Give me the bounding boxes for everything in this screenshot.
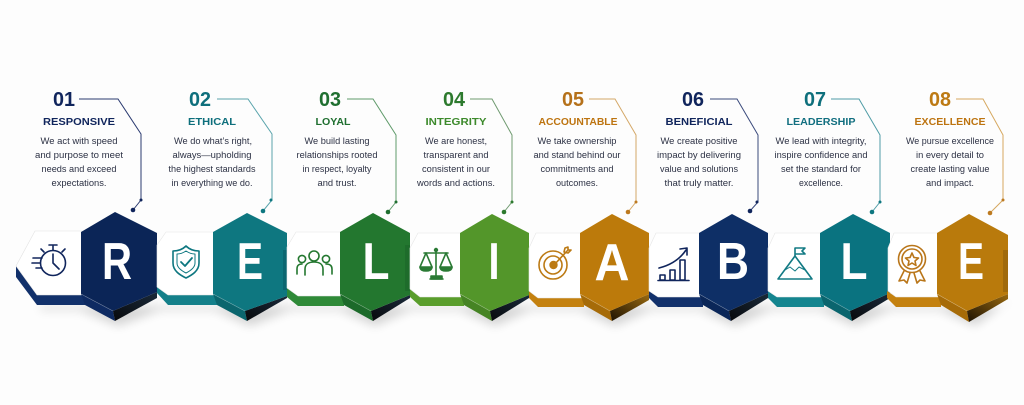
leader line (710, 99, 758, 213)
description (906, 136, 994, 189)
heading: responsive: RESPONSIVE (43, 116, 115, 128)
description: We take ownership (538, 136, 616, 147)
description: needs and exceed (42, 164, 116, 175)
icon: target (539, 247, 571, 279)
column 08: excellence (906, 89, 1004, 215)
leader line (347, 99, 398, 214)
number 01: 01 (53, 89, 75, 111)
description: expectations. (52, 178, 106, 189)
hexagon E: E (958, 233, 984, 291)
icon: shield (173, 246, 199, 278)
description: We do what’s right, (174, 136, 252, 147)
column 05: accountable (534, 89, 638, 214)
description: We act with speed (40, 136, 118, 147)
segment E (157, 213, 287, 321)
column 03: loyal (296, 89, 398, 214)
column 04: integrity (416, 89, 514, 214)
heading: ethical: ETHICAL (188, 116, 237, 128)
column 01: responsive (35, 89, 142, 212)
number 05: 05 (562, 89, 584, 111)
segment I (410, 214, 529, 321)
leader line (831, 99, 882, 214)
tab (768, 233, 824, 307)
tab (529, 233, 584, 307)
hexagon B: B (717, 233, 749, 291)
segment L second (768, 214, 890, 321)
description (534, 136, 621, 189)
column 07: leadership (774, 89, 882, 214)
description: and impact. (926, 178, 974, 189)
description (296, 136, 378, 189)
description: and trust. (318, 178, 356, 189)
leader line (589, 99, 638, 214)
description: consistent in our (422, 164, 491, 175)
column 02: ethical (168, 89, 272, 213)
icon: growth chart (658, 248, 689, 280)
description (774, 136, 868, 189)
hexagon L: L (362, 233, 390, 291)
description: We create positive (660, 136, 738, 147)
icon: award ribbon (898, 246, 926, 283)
heading: excellence: EXCELLENCE (914, 116, 986, 128)
description (657, 136, 741, 189)
leader line (79, 99, 142, 212)
number 04: 04 (443, 89, 466, 111)
description: set the standard for (781, 164, 862, 175)
description: in respect, loyalty (302, 164, 372, 175)
description: excellence. (799, 178, 843, 189)
icon: stopwatch (32, 245, 66, 276)
tab (410, 233, 464, 306)
hexagon I: I (488, 233, 500, 291)
tab (649, 233, 703, 307)
leader line (470, 99, 514, 214)
heading: accountable: ACCOUNTABLE (538, 116, 618, 128)
description (35, 136, 123, 189)
hexagon L: L (840, 233, 868, 291)
heading: beneficial: BENEFICIAL (666, 116, 733, 128)
number 08: 08 (929, 89, 951, 111)
leader line (956, 99, 1004, 215)
description: words and actions. (416, 178, 495, 189)
description: in every detail to (916, 150, 984, 161)
description (168, 136, 256, 189)
icon: people (297, 251, 332, 275)
description: in everything we do. (172, 178, 252, 189)
description: We pursue excellence (906, 136, 994, 147)
icon: scales (420, 249, 452, 279)
heading: loyal: LOYAL (316, 116, 351, 128)
number 03: 03 (319, 89, 341, 111)
segment L (287, 213, 410, 321)
hexagon R (81, 212, 157, 321)
description: commitments and (540, 164, 614, 175)
segment B (649, 214, 768, 321)
description (416, 136, 495, 189)
description: outcomes. (556, 178, 598, 189)
segment E last (887, 214, 1008, 322)
segment R (16, 212, 157, 321)
description: We build lasting (304, 136, 370, 147)
number 02: 02 (189, 89, 211, 111)
column 06: beneficial (657, 89, 758, 213)
description: always—upholding (172, 150, 252, 161)
description: inspire confidence and (774, 150, 868, 161)
description: the highest standards (168, 164, 256, 175)
description: We are honest, (425, 136, 487, 147)
tab (287, 232, 344, 306)
description: We lead with integrity, (776, 136, 866, 147)
description: and stand behind our (534, 150, 621, 161)
hexagon R: R (102, 233, 132, 291)
segment A (529, 214, 649, 321)
hexagon A: A (594, 234, 630, 292)
tab (157, 232, 217, 305)
hexagon E: E (237, 233, 263, 291)
heading: leadership: LEADERSHIP (786, 116, 856, 128)
description: create lasting value (910, 164, 990, 175)
icon: mountain flag (778, 248, 812, 279)
description: that truly matter. (664, 178, 734, 189)
description: relationships rooted (296, 150, 378, 161)
heading: integrity: INTEGRITY (426, 116, 486, 128)
description: value and solutions (660, 164, 738, 175)
description: impact by delivering (657, 150, 741, 161)
number 06: 06 (682, 89, 704, 111)
tab (887, 233, 941, 307)
tab with pointed left end (16, 231, 85, 305)
description: transparent and (424, 150, 488, 161)
number 07: 07 (804, 89, 826, 111)
description: and purpose to meet (35, 150, 123, 161)
leader line (217, 99, 272, 213)
